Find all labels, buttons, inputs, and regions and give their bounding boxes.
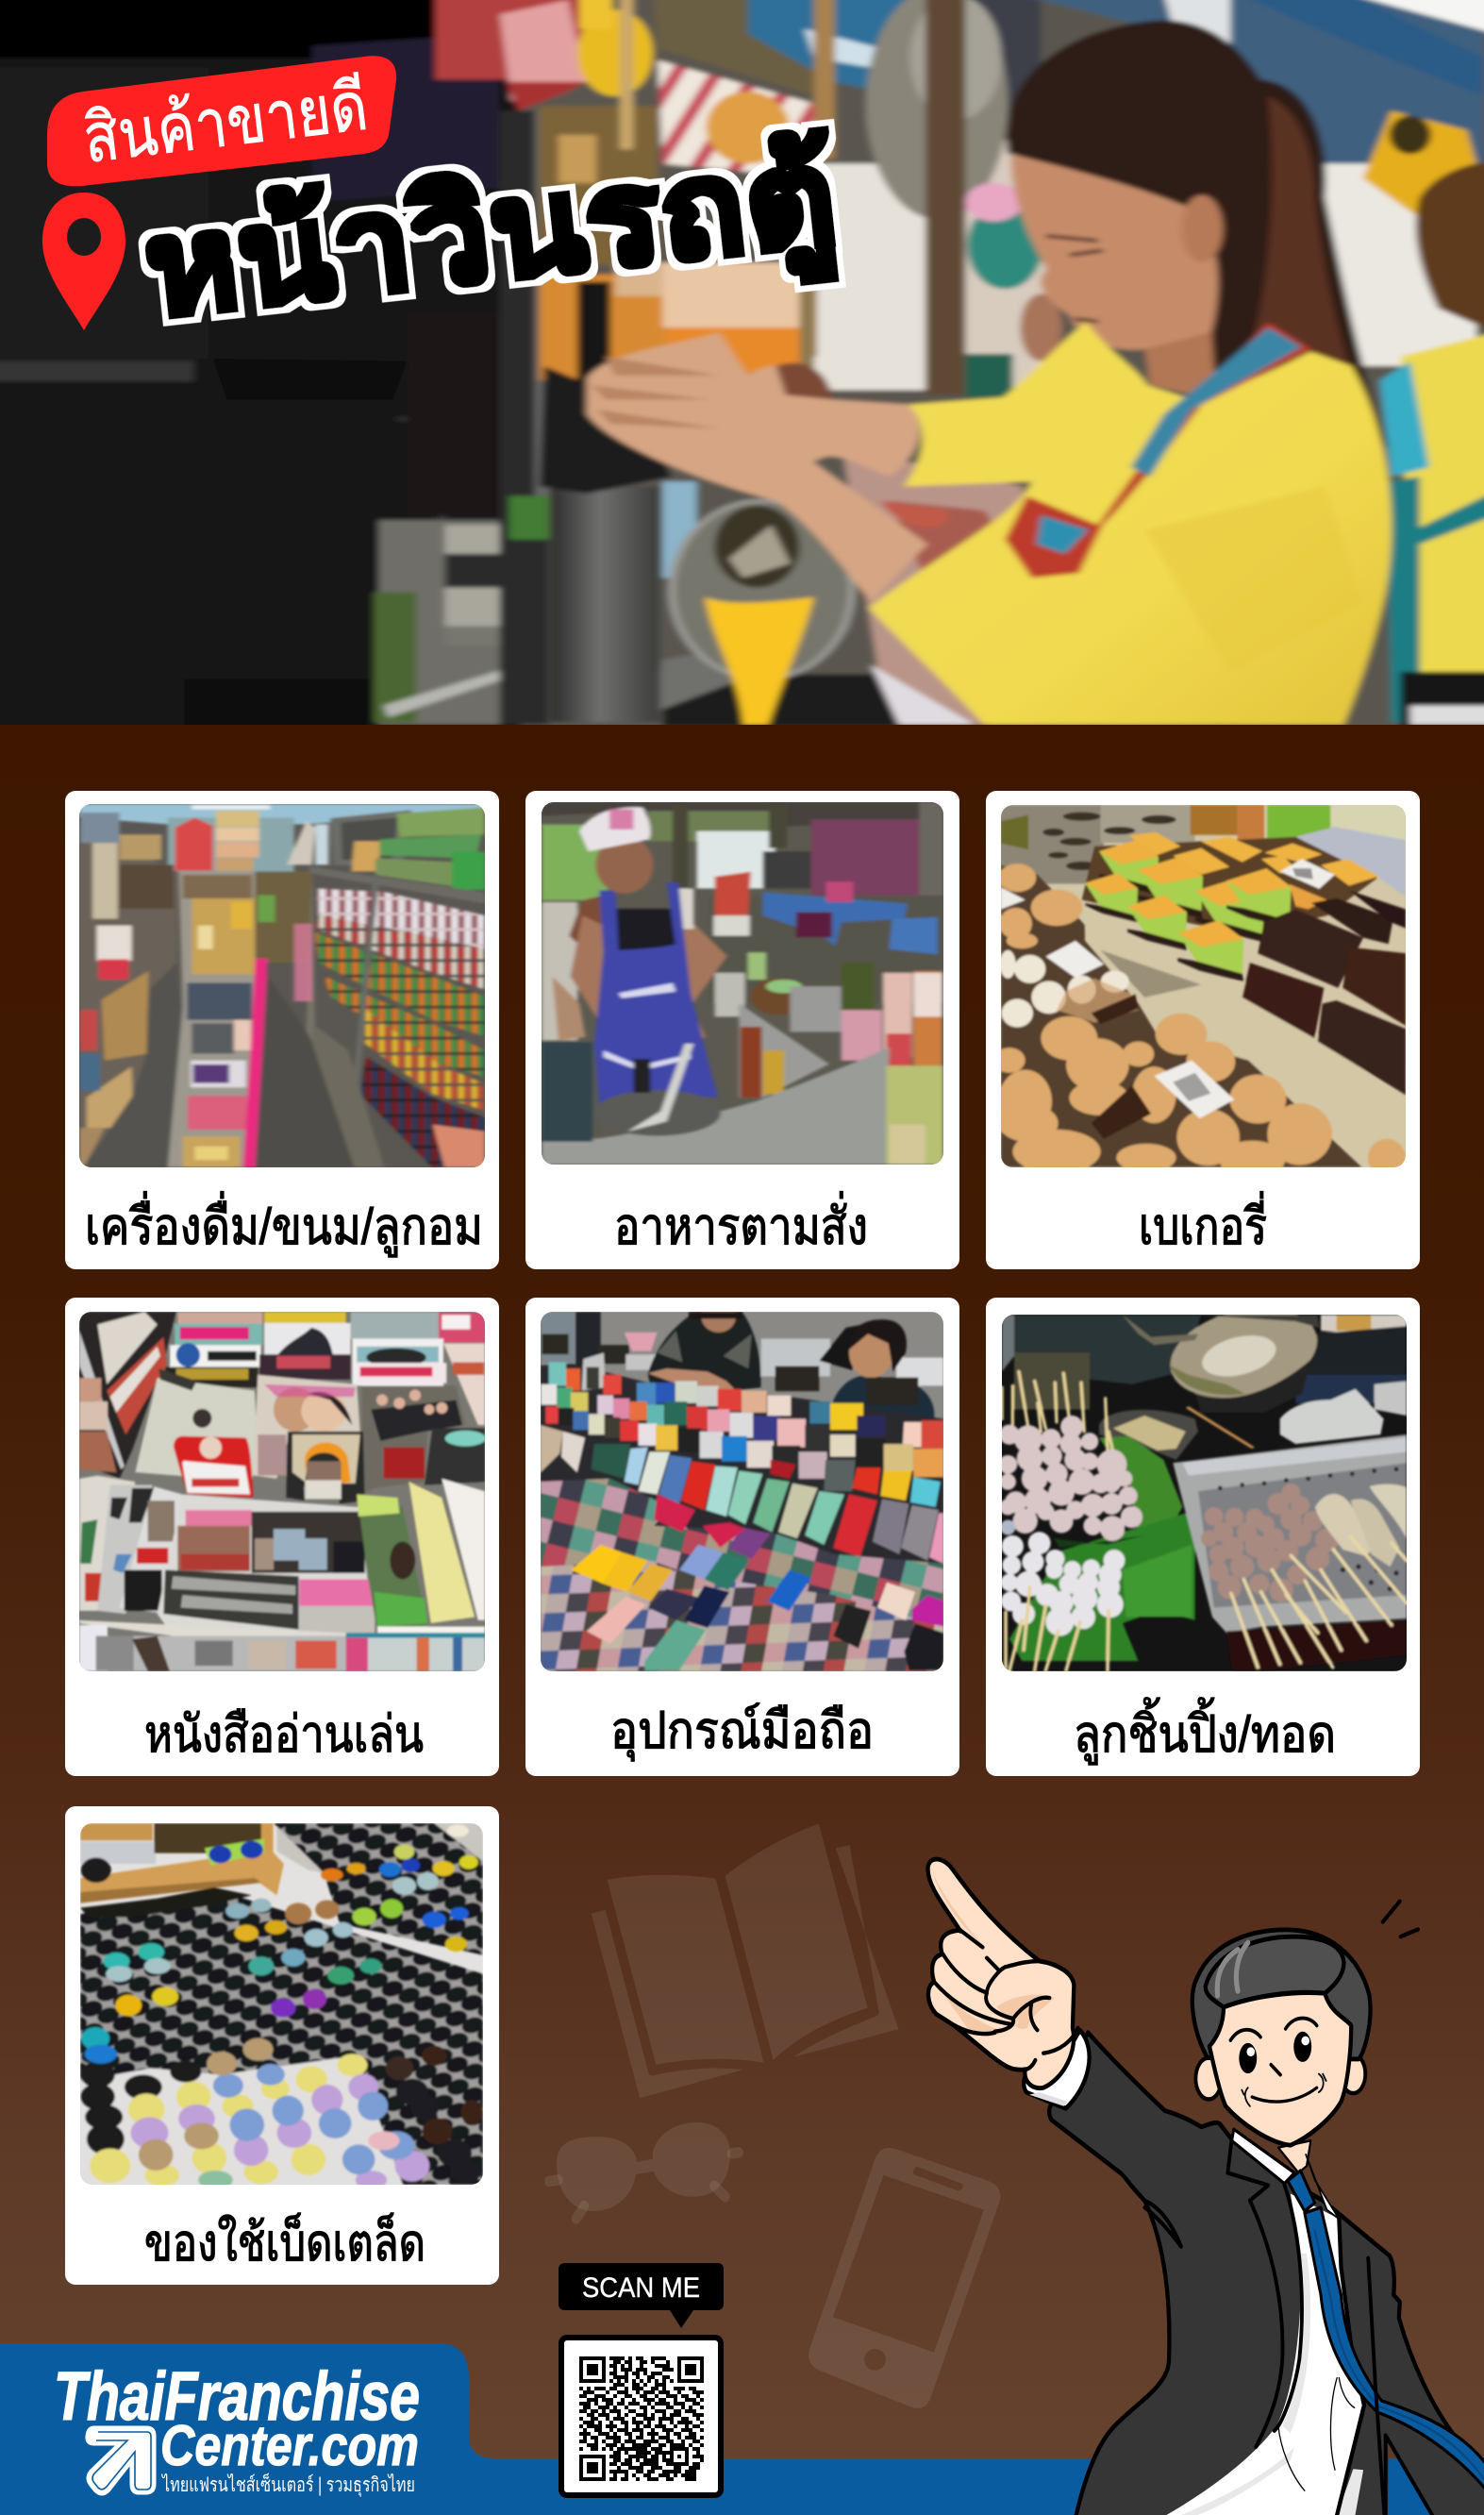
photo: newspapers and magazines [79,1312,485,1671]
label: ลูกชิ้นปิ้ง/ทอด [1074,1698,1336,1765]
panel: card grilled meatballs [986,1298,1420,1776]
label: ของใช้เบ็ดเตล็ด [144,2213,425,2272]
background decorations: book, glasses, phone [544,1823,1000,2408]
juice jug [540,275,814,380]
panel: card made-to-order food [525,791,959,1269]
label: อาหารตามสั่ง [614,1191,868,1255]
blue wedge behind coat [1388,2458,1432,2515]
photo: grocery aisle [79,804,485,1167]
photo: phone cases stall [541,1312,943,1671]
table and goods [662,674,993,728]
icon: red location pin [42,193,125,330]
tie [1288,2171,1484,2493]
title: หน้าวินรถตู้: หน้าวินรถตู้ [138,121,844,354]
photo: street cook with wok [542,802,943,1165]
jacket [1049,2033,1484,2515]
white shirt [1160,2193,1364,2515]
panel: card magazines [65,1298,499,1776]
QR code [559,2335,724,2498]
label: เบเกอรี่ [1139,1191,1267,1255]
photo: sunglasses display [80,1823,483,2185]
logo: ThaiFranchiseCenter.com: Center.com [160,2414,419,2477]
callout: SCAN ME bubble [559,2263,724,2328]
collar [1232,2129,1294,2184]
label: เครื่องดื่ม/ขนม/ลูกอม [85,1191,483,1257]
panel: card phone accessories [525,1298,959,1776]
label: หนังสืออ่านเล่น [144,1706,424,1763]
hand [928,1859,1074,2088]
head [1192,1902,1418,2145]
photo: meatball skewers [1002,1315,1407,1671]
logo: ThaiFranchiseCenter.com [54,2359,420,2497]
label: อุปกรณ์มือถือ [610,1702,874,1762]
cuff [1024,2030,1090,2108]
woman: shirt [869,322,1392,725]
woman: hair [1007,20,1390,448]
illustration: businessman pointing [925,1857,1484,2515]
blender base and pitcher [551,486,659,722]
blue footer band with logo tab [0,2343,1484,2515]
callout: SCAN ME bubble: SCAN ME [582,2272,700,2304]
panel: card bakery [986,791,1420,1269]
photo: bakery display [1001,805,1406,1167]
woman: face [1010,154,1218,350]
panel: card miscellaneous goods [65,1806,499,2285]
neck [1278,2140,1310,2173]
title: badge สินค้าขายดี: สินค้าขายดี [79,69,372,177]
lapels and creases [1132,2139,1384,2515]
woman: arms and hands [587,332,927,602]
panel: hero photo of juice vendor [0,0,1484,725]
panel: card drinks and snacks [65,791,499,1269]
